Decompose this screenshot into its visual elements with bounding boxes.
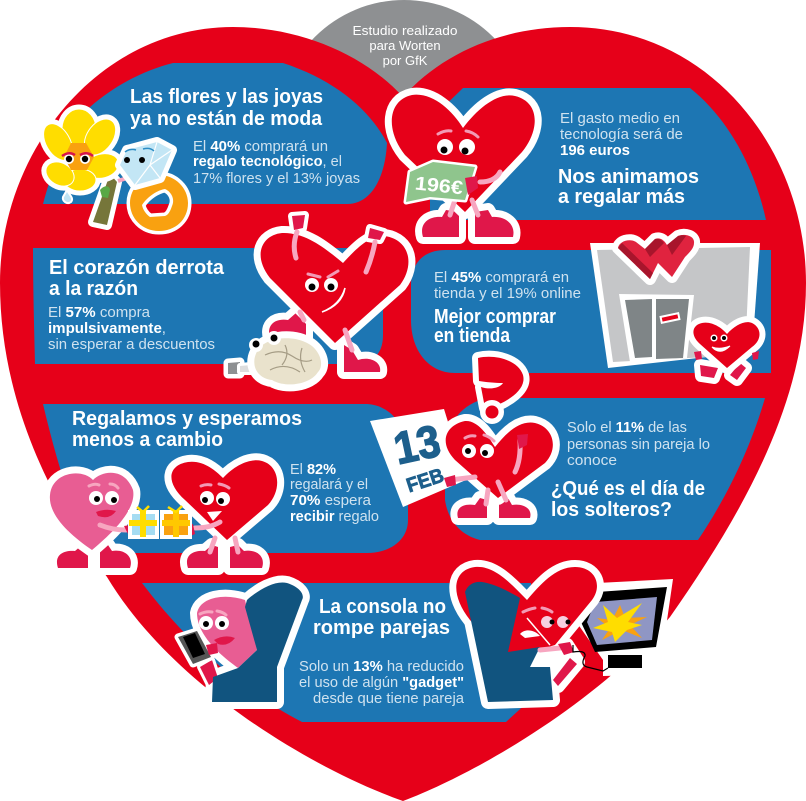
heading: heart beats reason bbox=[49, 257, 225, 300]
text: flowers statistic: regalo tecnológico, el bbox=[193, 154, 342, 170]
illustration: small happy heart bbox=[693, 322, 760, 380]
heading: store: Mejor comprar bbox=[434, 306, 556, 328]
text: store statistic: tienda y el 19% online bbox=[434, 286, 581, 302]
study credit badge: por GfK bbox=[383, 53, 428, 68]
text: gifts statistic bbox=[290, 462, 379, 525]
text: spend statistic: tecnología será de bbox=[560, 127, 683, 143]
heading: spend: a regalar más bbox=[558, 186, 685, 208]
panel: gifts bbox=[43, 404, 408, 553]
panel: console bbox=[142, 583, 531, 722]
text: console statistic bbox=[299, 659, 465, 707]
illustration: red heart giving gift bbox=[171, 460, 277, 568]
heading: store bbox=[434, 306, 556, 347]
text: singles statistic: personas sin pareja lo bbox=[567, 437, 710, 453]
heading: flowers bbox=[130, 86, 323, 130]
text: store statistic bbox=[434, 270, 581, 302]
icon: store door bbox=[619, 294, 694, 362]
illustration: calendar page bbox=[370, 409, 466, 507]
illustration: pink heart bbox=[50, 473, 137, 568]
text: console statistic: el uso de algún "gadget" bbox=[299, 675, 464, 691]
heading: gifts: Regalamos y esperamos bbox=[72, 408, 302, 430]
text: impulse statistic bbox=[48, 305, 215, 353]
panel: buy in store bbox=[411, 250, 771, 373]
icon: worten logo bbox=[618, 235, 694, 279]
illustration: heart with money: 196€ bbox=[414, 173, 464, 199]
text: console statistic: Solo un 13% ha reducido bbox=[299, 659, 464, 675]
heading: store: en tienda bbox=[434, 325, 511, 347]
text: impulse statistic: sin esperar a descuentos bbox=[48, 337, 215, 353]
illustration: pink heart on chair with tablet bbox=[178, 582, 303, 702]
study credit badge: Estudio realizado bbox=[352, 23, 458, 38]
text: flowers statistic: El 40% comprará un bbox=[193, 139, 328, 155]
study credit badge bbox=[278, 0, 530, 252]
illustration: diamond ring bbox=[118, 142, 188, 231]
illustration: brain bbox=[228, 331, 321, 384]
icon: gift boxes bbox=[129, 506, 190, 537]
panel: flowers and jewels bbox=[43, 63, 387, 204]
heading: singles: ¿Qué es el día de bbox=[551, 478, 705, 500]
text: gifts statistic: El 82% bbox=[290, 462, 336, 478]
heading: heart beats reason: El corazón derrota bbox=[49, 257, 225, 279]
text: store statistic: El 45% comprará en bbox=[434, 270, 569, 286]
heading: singles bbox=[551, 478, 705, 521]
heading: spend: Nos animamos bbox=[558, 166, 699, 188]
text: gifts statistic: recibir regalo bbox=[290, 509, 379, 525]
text: impulse statistic: El 57% compra bbox=[48, 305, 151, 321]
heading: flowers: ya no están de moda bbox=[130, 108, 323, 130]
text: spend statistic bbox=[560, 111, 683, 159]
text: spend statistic: 196 euros bbox=[560, 143, 630, 159]
text: gifts statistic: 70% espera bbox=[290, 493, 372, 509]
illustration: monitor with explosion bbox=[575, 579, 673, 676]
heading: gifts: menos a cambio bbox=[72, 429, 223, 451]
panel: heart beats reason bbox=[33, 248, 383, 364]
heading: console: rompe parejas bbox=[313, 617, 450, 639]
text: spend statistic: El gasto medio en bbox=[560, 111, 680, 127]
text: singles statistic bbox=[567, 420, 710, 469]
heading: spend bbox=[558, 166, 699, 208]
illustration: calendar page: 13 bbox=[389, 415, 445, 474]
illustration: sad flower bbox=[38, 109, 122, 225]
illustration: heart with money bbox=[392, 95, 535, 237]
illustration: heart defeating brain bbox=[261, 215, 408, 372]
text: flowers statistic bbox=[193, 139, 360, 187]
heading: gifts bbox=[72, 408, 302, 451]
illustration: calendar page: FEB bbox=[404, 465, 447, 497]
text: singles statistic: conoce bbox=[567, 453, 617, 469]
panel: average spend bbox=[430, 88, 766, 220]
illustration: confused heart bbox=[444, 421, 553, 518]
text: flowers statistic: 17% flores y el 13% joyas bbox=[193, 171, 360, 187]
text: gifts statistic: regalará y el bbox=[290, 477, 368, 493]
text: impulse statistic: impulsivamente , bbox=[48, 321, 166, 337]
heading: flowers: Las flores y las joyas bbox=[130, 86, 323, 108]
text: console statistic: desde que tiene pareja bbox=[313, 691, 465, 707]
heading: console: La consola no bbox=[319, 596, 446, 618]
heading: console bbox=[313, 596, 450, 639]
study credit badge: para Worten bbox=[369, 38, 441, 53]
heading: singles: los solteros? bbox=[551, 499, 672, 521]
illustration: question mark bbox=[478, 357, 524, 418]
text: singles statistic: Solo el 11% de las bbox=[567, 420, 687, 436]
illustration: store front bbox=[590, 235, 760, 368]
heading: heart beats reason: a la razón bbox=[49, 278, 138, 300]
panel: singles day bbox=[445, 398, 765, 540]
illustration: heart on chair gaming bbox=[456, 567, 608, 702]
